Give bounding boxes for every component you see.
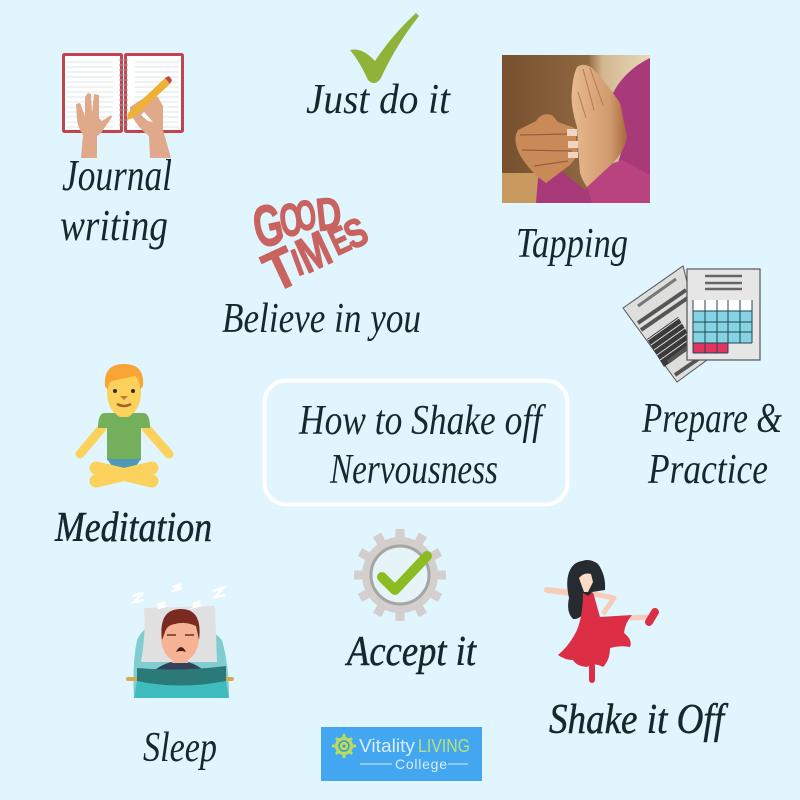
label: Tapping: Tapping xyxy=(516,221,628,267)
icon: Good Times lettering: M xyxy=(288,220,340,284)
icon: Good Times lettering: E xyxy=(323,218,357,264)
icon: Good Times lettering xyxy=(247,187,375,304)
label: Accept it: Accept it xyxy=(344,629,477,675)
logo: Vitality Living College xyxy=(321,727,482,781)
logo wordmark: LIVING xyxy=(418,736,470,756)
icon: papers with calendar table xyxy=(623,266,760,382)
icon: Good Times lettering: G xyxy=(247,191,289,261)
icon: Good Times lettering: D xyxy=(314,187,344,241)
label: Believe in you: Believe in you xyxy=(222,296,421,342)
icon: Good Times lettering: S xyxy=(337,209,375,258)
label: Prepare & Practice: Practice xyxy=(647,447,768,493)
label: Just do it: Just do it xyxy=(306,77,451,123)
icon: meditating person xyxy=(80,364,169,481)
icon: gear with check mark xyxy=(354,529,446,621)
logo subtitle: College xyxy=(395,756,447,772)
icon: logo sun xyxy=(332,734,356,758)
icon: Good Times lettering: O xyxy=(276,192,305,247)
title: How to Shake off xyxy=(298,398,546,444)
icon: dancer in red dress xyxy=(547,560,655,680)
logo wordmark xyxy=(359,736,470,756)
label: Journal writing xyxy=(60,151,172,250)
label: Journal writing: writing xyxy=(60,201,168,250)
icon: sleeping person in bed xyxy=(128,584,232,698)
logo wordmark: Vitality xyxy=(359,736,415,756)
title: Nervousness xyxy=(329,447,498,493)
icon: Good Times lettering: I xyxy=(287,242,309,284)
title xyxy=(298,398,546,493)
panel: central title box xyxy=(264,380,568,504)
photo: tapping hands xyxy=(502,55,650,203)
icon: notebook with writing hands xyxy=(64,54,182,158)
label: Meditation: Meditation xyxy=(54,505,212,551)
icon: green check mark xyxy=(350,13,419,83)
icon: Good Times lettering: T xyxy=(253,234,307,304)
logo subtitle xyxy=(360,756,468,772)
label: Sleep: Sleep xyxy=(143,725,217,771)
label: Journal writing: Journal xyxy=(62,151,172,200)
label: Prepare & Practice xyxy=(641,396,782,493)
label: Shake it Off: Shake it Off xyxy=(549,697,729,743)
icon: Good Times lettering: O xyxy=(293,191,319,240)
